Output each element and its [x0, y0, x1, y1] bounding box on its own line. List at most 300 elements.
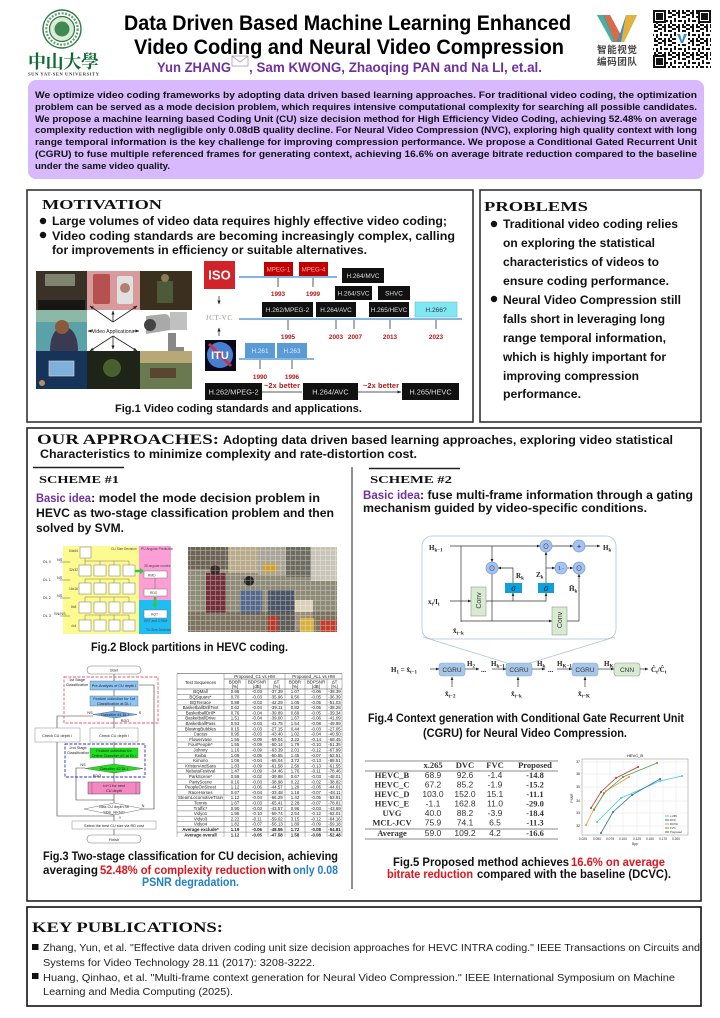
publication list: Learning and Media Computing (2025).: [43, 987, 233, 998]
table: fig 3 results: -59.02: [270, 816, 283, 821]
table: fig 3 results: -36.39: [328, 694, 341, 700]
table: fig 3 results: 3.15: [291, 816, 300, 821]
table: fig 3 results: -0.08: [311, 721, 322, 726]
chart: fig 5 RD curves: 36: [576, 772, 580, 776]
bullet list: problems: ensure coding performance.: [503, 274, 669, 288]
comparison: coding gains: [205, 381, 459, 400]
table: fig 3 results: 2.01: [291, 748, 300, 752]
CGRU chain: K−1: [562, 664, 572, 670]
diagram: fig 2 block partitions: RMD: [148, 574, 156, 578]
table: fig 3 results: 1.55: [231, 737, 240, 742]
table: fig 3 results: 0.22: [291, 779, 300, 784]
table: fig 3 results: [%]: [232, 684, 238, 689]
table: fig 3 results: -0.04: [252, 790, 263, 795]
table: fig 3 results: -0.04: [252, 716, 263, 721]
table: fig 3 results: -50.14: [270, 742, 283, 747]
flowchart: fig 3 two-stage classification: NS: [87, 711, 93, 715]
table: fig 3 results: -0.03: [252, 779, 263, 784]
table: fig 3 results: -43.57: [270, 806, 283, 811]
table: fig 3 results: 1.58: [291, 832, 300, 837]
table: fig 3 results: -63.39: [270, 748, 283, 752]
table: fig 3 results: -53.91: [328, 795, 341, 800]
diagram: fig 4 CGRU: ⊙: [489, 564, 495, 572]
table: fig 3 results: 1.51: [231, 716, 240, 721]
flowchart: fig 3 two-stage classification: Classification: [67, 751, 89, 755]
table: fig 5 BD-rate: 162.8: [454, 798, 476, 808]
flowchart: fig 3 two-stage classification: Online Classifier #2 at DL i: [92, 754, 137, 758]
heading: scheme 2: SCHEME #2: [370, 475, 452, 486]
bullet list: problems: performance.: [503, 387, 581, 401]
table: fig 3 results: -0.06: [252, 827, 263, 832]
chart: fig 5 RD curves: 0.025: [579, 837, 587, 841]
table: fig 3 results: 1.45: [291, 753, 300, 758]
table: fig 5 BD-rate: -3.9: [488, 808, 503, 818]
table: fig 5 BD-rate: 88.2: [457, 808, 474, 818]
caption: fig 4: [368, 713, 684, 740]
logo: Sun Yat-sen University: 中山大學: [28, 52, 99, 72]
table: fig 3 results: SteamLocomotiveTrain: [178, 795, 224, 800]
table: fig 3 results: 0.82: [291, 705, 300, 710]
table: fig 3 results: -38.39: [328, 689, 341, 694]
chart: fig 5 RD curves: 0.075: [606, 837, 614, 841]
caption: fig 3: Fig.3 Two-stage classification for CU decision, achieving: [43, 851, 338, 863]
CGRU chain: = x̂: [399, 666, 410, 674]
legend: FVC: [670, 826, 676, 830]
table: fig 3 results: -50.55: [270, 753, 283, 758]
diagram: fig 2 block partitions: CU Size Decision: [111, 547, 137, 551]
CGRU chain: K: [609, 664, 613, 670]
heading: our approaches: [37, 432, 673, 461]
table: fig 5 BD-rate: 11.0: [487, 798, 503, 808]
table: fig 3 results: -61.58: [270, 763, 283, 768]
table: fig 3 results: -0.05: [252, 832, 263, 837]
table: fig 3 results: [%]: [331, 684, 338, 689]
table: fig 3 results: -0.12: [311, 811, 322, 816]
chart: fig 5 RD curves: [570, 753, 688, 846]
table: fig 3 results: -0.05: [311, 710, 322, 715]
table: fig 5 BD-rate: 92.6: [457, 770, 474, 780]
text: scheme 1 idea: : model the mode decision problem in: [91, 491, 320, 505]
table: fig 3 results: -0.11: [252, 816, 262, 821]
CGRU chain: k: [542, 664, 545, 670]
diagram: fig 4 CGRU: ⊙: [576, 564, 582, 572]
abstract text: We propose a machine learning based Coding Unit (CU) size decision method for High Efficiency Video Coding, achieving 52.48% on average: [35, 113, 697, 124]
diagram: fig 2 block partitions: 35 angular modes: [144, 564, 171, 568]
text: scheme 1 idea: [36, 491, 334, 535]
table: fig 3 results: -33.48: [270, 790, 283, 795]
logo: Sun Yat-sen University: [28, 10, 100, 76]
table: fig 3 results: -0.10: [311, 742, 322, 747]
table: fig 3 results: -0.07: [311, 800, 322, 806]
flowchart: fig 3 two-stage classification: 2nd Stage: [69, 746, 87, 750]
flowchart: fig 3 two-stage classification: SDS_Ni<Ni?: [103, 810, 125, 814]
table: fig 3 results: 0.96: [291, 806, 300, 811]
table: fig 5 BD-rate: HEVC_E: [375, 798, 410, 808]
panel: problems: [480, 190, 701, 422]
flowchart: fig 3 two-stage classification: Classification: [66, 683, 88, 687]
CGRU chain: k−1: [496, 664, 505, 670]
table: fig 3 results: -38.82: [328, 779, 341, 784]
years: 2007: [348, 334, 363, 341]
sigma gates: σ: [511, 583, 516, 593]
table: fig 3 results: 0.70: [231, 694, 240, 700]
box: H.266: H.266?: [425, 307, 447, 314]
title: Video Coding and Neural Video Compression: [134, 36, 564, 59]
CGRU chain: ...: [481, 666, 486, 674]
scheme 1: [33, 468, 342, 889]
heading: our approaches: OUR APPROACHES:: [37, 432, 219, 448]
table: fig 3 results: 1.42: [291, 795, 300, 800]
logo: ITU: [205, 340, 236, 371]
conv blocks: Conv: [476, 592, 483, 609]
CGRU chain: t: [656, 670, 658, 676]
table: fig 5 BD-rate: -29.0: [526, 798, 544, 808]
table: fig 3 results: 2.28: [291, 800, 300, 806]
years: 1993: [271, 291, 286, 298]
flowchart: fig 3 two-stage classification: Select the best CU size via RD cost: [84, 824, 145, 828]
CGRU chain: CGRU: [509, 667, 529, 674]
legend: DVC: [670, 818, 676, 822]
caption: fig 3: 52.48% of complexity reduction: [100, 865, 266, 877]
table: fig 3 results: 1.72: [291, 827, 300, 832]
chart: fig 5 RD curves: 0.100: [619, 837, 627, 841]
diagram: fig 2 block partitions: [43, 546, 173, 634]
math labels: H: [603, 544, 608, 552]
table: fig 3 results: 0.15: [231, 726, 240, 731]
heading: our approaches: Characteristics to minimize complexity and rate-distortion cost.: [40, 449, 417, 461]
diagram: fig 4 CGRU: 1 -: [558, 566, 564, 572]
math labels: k: [521, 576, 524, 582]
table: fig 3 results: 0.67: [231, 790, 240, 795]
table: fig 3 results: 1.83: [231, 763, 240, 768]
table: fig 3 results: -68.45: [328, 737, 341, 742]
text: scheme 2 idea: : fuse multi-frame information through a gating: [420, 488, 693, 502]
table: fig 3 results: BasketballDrillText: [183, 705, 219, 710]
math labels: H: [429, 544, 434, 552]
table: fig 3 results: 1.67: [291, 716, 300, 721]
table: fig 3 results: -0.03: [252, 694, 263, 700]
chart: fig 5 RD curves: 32: [576, 824, 580, 828]
table: fig 3 results: RaceHorses: [188, 790, 213, 795]
title: [124, 12, 571, 59]
table: fig 3 results: -0.09: [252, 748, 263, 752]
table: fig 3 results: -0.09: [311, 822, 322, 827]
bullet list: motivation: [40, 214, 455, 257]
flowchart: fig 3 two-stage classification: Max CU depth hit: [99, 805, 130, 809]
table: fig 3 results: -78.46: [328, 769, 341, 774]
bullet list: motivation: Large volumes of video data requires highly effective video coding;: [52, 214, 447, 228]
table: fig 3 results: 0.69: [291, 710, 300, 715]
CGRU chain: H: [391, 666, 396, 674]
table: fig 3 results: -43.40: [270, 732, 283, 737]
diagram: fig 2 block partitions: DL 0: [43, 560, 51, 564]
flowchart: fig 3 two-stage classification: Pre-Analysis of CU depth i: [92, 684, 136, 688]
table: fig 3 results: -0.05: [311, 694, 322, 700]
CGRU chain: t−2: [448, 694, 456, 700]
table: fig 5 BD-rate: x.265: [423, 760, 443, 770]
table: fig 3 results: 0.98: [231, 689, 240, 694]
legend: Proposed: [670, 830, 682, 834]
table: fig 3 results: -39.88: [270, 774, 283, 779]
diagram: fig 2 block partitions: 16x16: [69, 587, 78, 591]
panel: motivation: [27, 190, 473, 422]
box: H.266: [415, 302, 457, 317]
table: fig 3 results: Keiba: [195, 753, 207, 758]
table: fig 3 results: Test Sequences: [185, 680, 217, 685]
chart: fig 5 RD curves: 34: [576, 799, 580, 803]
table: fig 3 results: -0.05: [311, 705, 322, 710]
table: fig 3 results: 2.22: [231, 816, 240, 821]
table: fig 3 results: -67.99: [328, 748, 341, 752]
table: fig 3 results: 0.62: [231, 705, 240, 710]
table: fig 5 BD-rate: [365, 760, 558, 839]
table: fig 3 results: -88.51: [328, 758, 341, 763]
caption: fig 4: Fig.4 Context generation with Conditional Gate Recurrent Unit: [368, 713, 684, 725]
table: fig 3 results: 1.82: [231, 822, 240, 827]
table: fig 5 BD-rate: -11.3: [526, 818, 544, 828]
logo: ISO: [204, 261, 235, 289]
math labels: k: [574, 590, 577, 594]
chart: fig 5 RD curves: 0.125: [633, 837, 641, 841]
diagram: fig 2 block partitions: SN/NS: [54, 612, 66, 616]
table: fig 3 results: 0.90: [231, 806, 240, 811]
CGRU chain: t−K: [582, 694, 590, 700]
table: fig 3 results: 1.12: [231, 832, 240, 837]
CGRU chain: H: [604, 660, 609, 668]
table: fig 3 results: -0.09: [252, 742, 263, 747]
table: fig 5 BD-rate: HEVC_B: [375, 770, 410, 780]
table: fig 5 BD-rate: 67.2: [425, 780, 442, 790]
table: fig 3 results: -49.99: [328, 721, 341, 726]
diagram: fig 2 block partitions: DL 1: [43, 578, 51, 582]
table: fig 5 BD-rate: 75.9: [425, 818, 442, 828]
table: fig 3 results: -34.46: [270, 769, 283, 774]
bullet list: problems: improving compression: [503, 369, 639, 383]
bullet list: problems: characteristics of videos to: [503, 255, 659, 269]
ITU boxes: [245, 343, 307, 358]
heading: motivation: MOTIVATION: [42, 198, 162, 213]
comparison: coding gains: H.262/MPEG-2: [208, 388, 259, 396]
arrows: applications: [88, 306, 139, 351]
logo: Sun Yat-sen University: SUN YAT-SEN UNIVERSITY: [28, 72, 100, 76]
table: fig 3 results: [dB]: [312, 684, 320, 689]
logo: team V: 智能视觉: [597, 44, 637, 56]
sigma gates: σ: [544, 583, 549, 593]
table: fig 3 results: -0.06: [252, 785, 263, 790]
diagram: fig 2 block partitions: DL 2: [43, 596, 51, 600]
standard boxes: black: SHVC: [385, 290, 403, 298]
table: fig 3 results: BlowingBubbles: [185, 726, 217, 731]
table: fig 3 results: -44.01: [328, 785, 341, 790]
table: fig 3 results: -0.05: [311, 795, 322, 800]
table: fig 3 results: 0.50: [291, 694, 300, 700]
table: fig 5 BD-rate: 109.2: [454, 828, 476, 838]
authors: [157, 56, 542, 75]
chart: fig 5 RD curves: 0.150: [646, 837, 654, 841]
table: fig 5 BD-rate: 103.0: [422, 789, 444, 799]
authors: , Sam KWONG, Zhaoqing PAN and Na LI, et.al.: [249, 59, 542, 75]
table: fig 3 results: -44.57: [270, 785, 283, 790]
publication list: Huang, Qinhao, et al. "Multi-frame context generation for Neural Video Compression." IEEE International Symposium on Machine: [43, 973, 675, 984]
table: fig 3 results: 1.12: [231, 795, 240, 800]
table: fig 3 results: 1.79: [291, 742, 300, 747]
text: scheme 2 idea: Basic idea: [363, 488, 420, 502]
table: fig 3 results: -0.03: [252, 800, 263, 806]
table: fig 3 results: 2.59: [291, 763, 300, 768]
math labels: t−k: [456, 632, 464, 636]
flowchart: fig 3 two-stage classification: Feature collection for 1st: [93, 697, 136, 701]
years: 1990: [253, 374, 268, 381]
table: fig 3 results: -47.58: [270, 832, 283, 837]
table: fig 3 results: -39.00: [270, 716, 283, 721]
CGRU chain: t−k: [514, 694, 522, 700]
text: scheme 1 idea: Basic idea: [36, 491, 91, 505]
legend: [665, 814, 682, 834]
table: fig 3 results: Tennis: [194, 800, 208, 806]
table: fig 3 results: -78.81: [328, 800, 341, 806]
CGRU chain: ...: [548, 666, 554, 674]
table: fig 3 results: -0.12: [311, 816, 322, 821]
CGRU chain: CGRU: [575, 667, 595, 674]
table: fig 3 results: -0.03: [252, 689, 263, 694]
table: fig 3 results: 2.54: [291, 811, 300, 816]
bullet list: motivation: Video coding standards are becoming increasingly complex, calling: [52, 229, 455, 243]
table: fig 5 BD-rate: MCL-JCV: [372, 818, 412, 828]
abstract text: complexity reduction with negligible only 0.08dB quality decline. For Neural Video Compression (NVC), exploring high quality context with long: [35, 124, 697, 135]
table: fig 3 results: -0.11: [311, 769, 321, 774]
table: fig 3 results: Proposed_C1 vs HM: [234, 674, 275, 679]
table: fig 3 results: 1.16: [231, 748, 240, 752]
table: fig 3 results: 1.12: [231, 785, 240, 790]
table: fig 3 results: -0.09: [252, 737, 263, 742]
years: 1999: [306, 291, 321, 298]
panel: key publications: [27, 907, 701, 1006]
table: fig 5 BD-rate: 4.2: [489, 828, 501, 838]
table: fig 3 results: ΔT: [332, 680, 338, 684]
wiring: [450, 546, 600, 622]
CGRU chain: 2: [472, 664, 475, 670]
table: fig 3 results: 1.19: [231, 827, 240, 832]
diagram: fig 2 block partitions: TU Size Decision: [146, 628, 171, 632]
table: fig 5 BD-rate: 68.9: [425, 770, 442, 780]
chart: fig 5 RD curves: 33: [576, 811, 580, 815]
standard boxes: black: [262, 268, 410, 317]
table: fig 3 results: -0.12: [311, 748, 322, 752]
table: fig 3 results: Vidyo4: [194, 822, 208, 827]
flowchart: fig 3 two-stage classification: RDO: [121, 719, 129, 723]
table: fig 3 results: 1.06: [231, 758, 240, 763]
logo: team V: 编码团队: [597, 56, 637, 68]
table: fig 3 results: -0.04: [252, 705, 263, 710]
caption: fig 3: [43, 851, 339, 889]
diagram: fig 2 block partitions: NS: [57, 594, 63, 598]
table: fig 3 results: 1.05: [291, 700, 300, 705]
table: fig 3 results: -0.07: [252, 822, 263, 827]
timeline: standards: [239, 262, 462, 381]
table: fig 3 results: -39.11: [270, 705, 283, 710]
table: fig 5 BD-rate: -11.1: [526, 789, 544, 799]
diagram: fig 2 block partitions: RQT: [151, 612, 158, 616]
diagram: fig 2 block partitions: DST and CTBM: [144, 619, 167, 623]
table: fig 3 results: -0.03: [252, 806, 263, 811]
table: fig 3 results: -0.03: [252, 721, 263, 726]
bullet list: problems: Neural Video Compression still: [503, 293, 681, 307]
publication list: Zhang, Yun, et al. "Effective data driven coding unit size decision approaches for HEVC INTRA coding." IEEE Transactions on Circuits and: [43, 943, 700, 954]
text: scheme 2 idea: [363, 488, 693, 515]
table: fig 5 BD-rate: HEVC_C: [375, 780, 409, 790]
panel: abstract: [28, 80, 704, 179]
table: fig 3 results: BQSquare*: [189, 694, 212, 700]
standard boxes: black: H.264/MVC: [346, 273, 380, 280]
flowchart: fig 3 two-stage classification: NS: [80, 763, 86, 767]
table: fig 3 results: -48.01: [328, 774, 341, 779]
table: fig 3 results: BDPSNR: [307, 680, 325, 684]
CGRU chain: t−1: [410, 670, 417, 676]
table: fig 3 results: 1.09: [231, 753, 240, 758]
comparison: coding gains: H.265/HEVC: [409, 388, 452, 396]
bullet list: problems: falls short in leveraging long: [503, 312, 665, 326]
gates: [486, 540, 585, 574]
chart: fig 5 RD curves: 0.050: [593, 837, 601, 841]
table: fig 3 results: Vidyo1: [194, 811, 208, 816]
table: fig 3 results: -0.13: [311, 758, 322, 763]
table: fig 3 results: -65.41: [270, 800, 283, 806]
CGRU chain: H: [491, 660, 496, 668]
ISO boxes: MPEG-4: [302, 266, 326, 274]
bullet list: problems: [491, 217, 681, 401]
table: fig 3 results: -0.10: [252, 811, 263, 816]
comparison: coding gains: ~2x better: [363, 381, 399, 390]
table: fig 3 results: -0.03: [311, 806, 322, 811]
image collage: video applications: [36, 271, 192, 389]
table: fig 5 BD-rate: HEVC_D: [375, 789, 409, 799]
table: fig 3 results: 0.67: [291, 774, 300, 779]
logo: ITU: ITU: [211, 350, 229, 362]
table: fig 3 results: -0.03: [252, 726, 263, 731]
legend: x.265: [670, 814, 677, 818]
diagram: fig 2 block partitions: NS: [57, 576, 63, 580]
table: fig 3 results: Cactus: [194, 732, 208, 737]
table: fig 3 results: -0.08: [311, 832, 322, 837]
table: fig 3 results: Flowervase: [189, 737, 212, 742]
flowchart: fig 3 two-stage classification: Y: [119, 816, 122, 820]
table: fig 3 results: 1.76: [291, 769, 300, 774]
caption: fig 5: [387, 857, 671, 881]
ITU boxes: H.263: [283, 348, 301, 355]
table: fig 3 results: -48.11: [328, 790, 341, 795]
panel: our approaches: [27, 428, 701, 901]
logo: ISO: ISO: [208, 268, 231, 282]
table: fig 3 results: -38.28: [328, 705, 341, 710]
table: fig 3 results: BQMall: [193, 689, 208, 694]
table: fig 3 results: 1.67: [231, 800, 240, 806]
table: fig 5 BD-rate: Proposed: [518, 760, 552, 770]
table: fig 5 BD-rate: 59.0: [425, 828, 442, 838]
table: fig 3 results: KristenAndSara: [185, 763, 216, 768]
text: scheme 1 idea: solved by SVM.: [36, 521, 124, 535]
table: fig 3 results: -0.06: [311, 716, 322, 721]
math labels: k: [541, 576, 544, 580]
table: fig 3 results: -64.16: [328, 816, 341, 821]
text: scheme 1 idea: HEVC as two-stage classification problem and then: [36, 506, 334, 520]
flowchart: fig 3 two-stage classification: [35, 666, 158, 843]
table: fig 3 results: -0.04: [252, 710, 263, 715]
table: fig 5 BD-rate: -15.2: [526, 780, 544, 790]
table: fig 3 results: 1.89: [291, 822, 300, 827]
table: fig 3 results: -0.04: [252, 795, 263, 800]
table: fig 3 results: -37.39: [270, 689, 283, 694]
table: fig 3 results: FourPeople*: [188, 742, 213, 747]
